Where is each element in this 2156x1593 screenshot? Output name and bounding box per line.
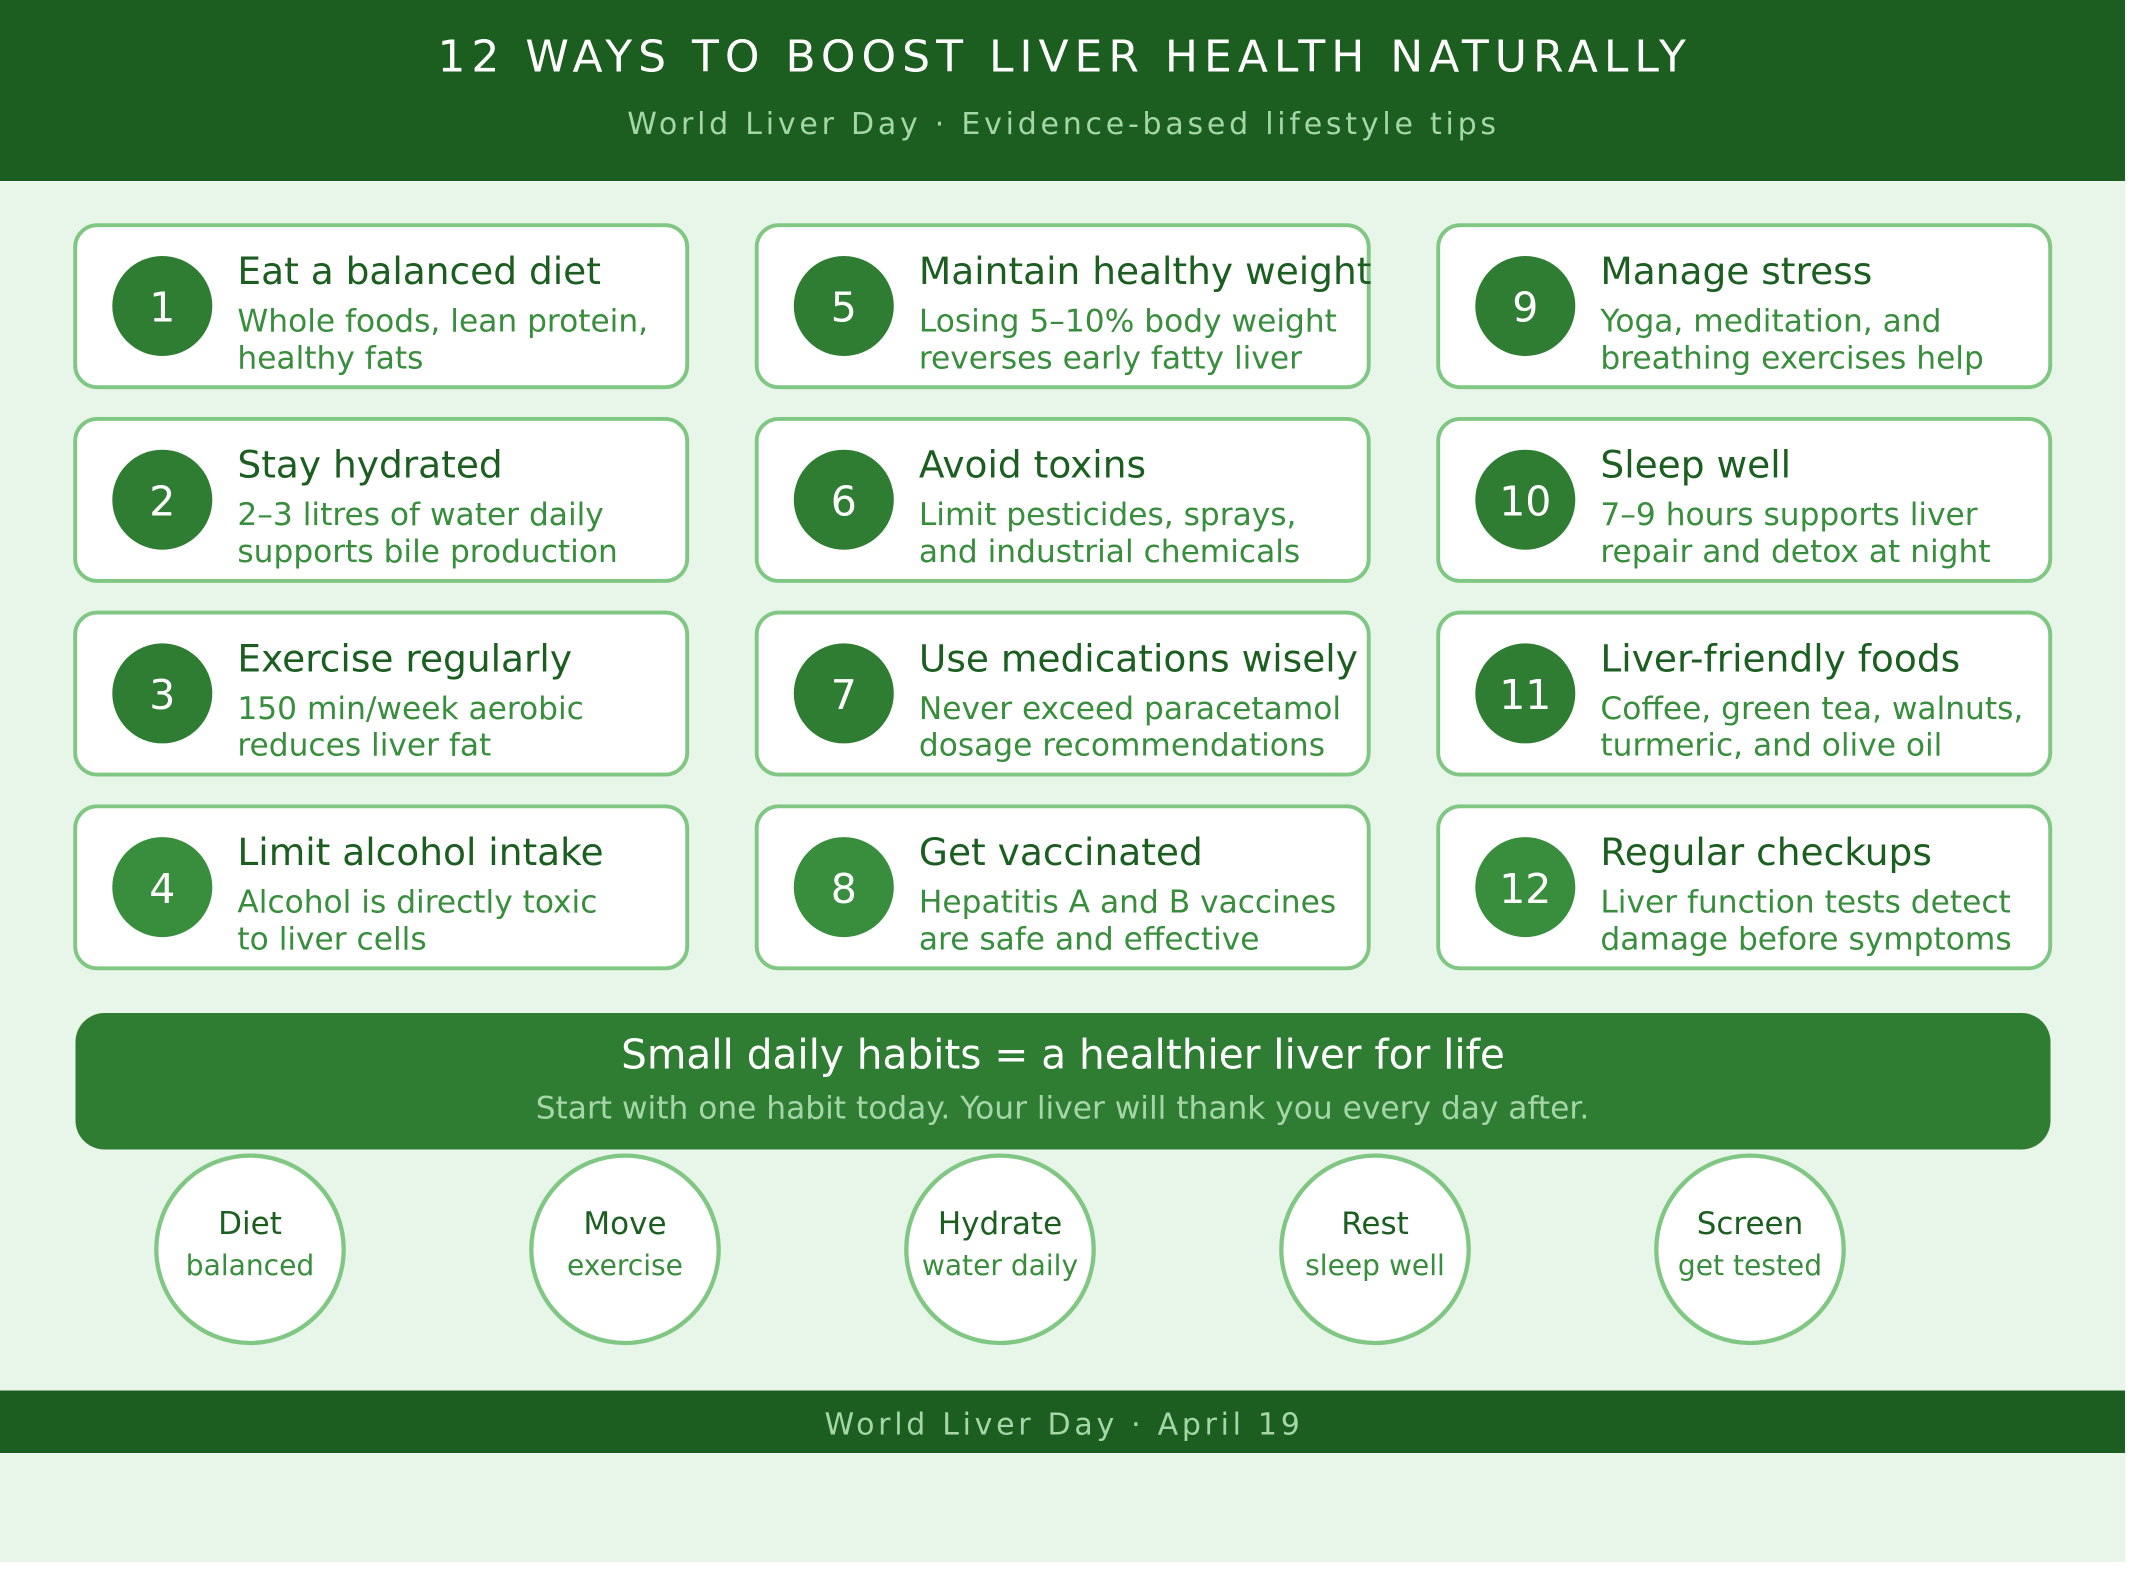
number badge 9 bbox=[1475, 256, 1575, 356]
number badge 4 bbox=[112, 837, 212, 937]
number badge 11 bbox=[1475, 643, 1575, 743]
tip 4 heading: Limit alcohol intake bbox=[237, 830, 604, 874]
tip 10 heading: Sleep well bbox=[1600, 443, 1791, 487]
tip 7 description: Never exceed paracetamol bbox=[919, 691, 1341, 727]
tip 6 description: Limit pesticides, sprays, bbox=[919, 497, 1296, 533]
tip 9 description bbox=[1599, 304, 1984, 376]
pill: screen bbox=[1656, 1156, 1844, 1343]
pill: diet bbox=[156, 1156, 344, 1343]
number badge 8 bbox=[794, 837, 894, 937]
pill: hydrate: water daily bbox=[922, 1249, 1078, 1282]
tip 2 description bbox=[237, 497, 618, 570]
tip 6 description: and industrial chemicals bbox=[919, 534, 1300, 570]
tip 11 heading: Liver-friendly foods bbox=[1600, 636, 1960, 680]
number badge 6: 6 bbox=[831, 477, 857, 525]
number badge 5 bbox=[794, 256, 894, 356]
tip 12 heading: Regular checkups bbox=[1600, 830, 1932, 874]
number badge 7 bbox=[794, 643, 894, 743]
panel: tip 12 bbox=[1438, 806, 2050, 968]
tip 11 description: Coffee, green tea, walnuts, bbox=[1600, 691, 2023, 727]
tip 7 description: dosage recommendations bbox=[919, 728, 1325, 764]
tip 4 description: Alcohol is directly toxic bbox=[237, 885, 597, 921]
panel: tip 1 bbox=[75, 225, 687, 387]
footer band bbox=[0, 1390, 2125, 1453]
pill: move: exercise bbox=[567, 1249, 683, 1282]
number badge 2: 2 bbox=[149, 477, 175, 525]
number badge 12: 12 bbox=[1499, 865, 1551, 913]
tip 4 description bbox=[237, 885, 597, 957]
number badge 12 bbox=[1475, 837, 1575, 937]
tip 3 description bbox=[237, 691, 584, 764]
panel: tip 5 bbox=[757, 225, 1371, 387]
pill: rest: sleep well bbox=[1305, 1249, 1445, 1282]
tip 5 heading: Maintain healthy weight bbox=[919, 249, 1371, 293]
number badge 9: 9 bbox=[1512, 284, 1538, 332]
tip 3 description: 150 min/week aerobic bbox=[237, 691, 584, 727]
number badge 10 bbox=[1475, 450, 1575, 550]
tip 9 heading: Manage stress bbox=[1600, 249, 1872, 293]
panel: tip 2 bbox=[75, 419, 687, 581]
number badge 11: 11 bbox=[1499, 671, 1551, 719]
banner headline: Small daily habits = a healthier liver for life bbox=[621, 1030, 1505, 1078]
subtitle: World Liver Day · Evidence-based lifestyle tips bbox=[627, 107, 1500, 142]
tip 3 heading: Exercise regularly bbox=[237, 636, 572, 680]
pill: screen: get tested bbox=[1678, 1249, 1822, 1282]
panel: tip 11 bbox=[1438, 613, 2050, 775]
tip 8 description bbox=[919, 885, 1336, 957]
tip 9 description: Yoga, meditation, and bbox=[1599, 304, 1941, 340]
number badge 3 bbox=[112, 643, 212, 743]
header band bbox=[0, 0, 2125, 181]
tip 10 description bbox=[1600, 497, 1991, 570]
pill: screen: Screen bbox=[1697, 1206, 1803, 1242]
number badge 10: 10 bbox=[1499, 477, 1551, 525]
tip 1 description: Whole foods, lean protein, bbox=[237, 304, 648, 340]
tip 2 description: 2–3 litres of water daily bbox=[237, 497, 604, 533]
tip 7 heading: Use medications wisely bbox=[919, 636, 1358, 680]
number badge 4: 4 bbox=[149, 865, 175, 913]
pill: move bbox=[531, 1156, 719, 1343]
banner subtext: Start with one habit today. Your liver will thank you every day after. bbox=[536, 1090, 1589, 1126]
tip 1 description bbox=[237, 304, 648, 376]
tip 2 heading: Stay hydrated bbox=[237, 443, 503, 487]
pill: hydrate: Hydrate bbox=[938, 1206, 1062, 1242]
panel: tip 10 bbox=[1438, 419, 2050, 581]
tip 12 description: damage before symptoms bbox=[1600, 921, 2012, 957]
tip 1 heading: Eat a balanced diet bbox=[237, 249, 601, 293]
tip 5 description: reverses early fatty liver bbox=[919, 340, 1302, 376]
tip 11 description: turmeric, and olive oil bbox=[1600, 728, 1942, 764]
pill: hydrate bbox=[906, 1156, 1094, 1343]
pill: move: Move bbox=[583, 1206, 667, 1242]
tip 1 description: healthy fats bbox=[237, 340, 423, 376]
tip 5 description bbox=[919, 304, 1337, 376]
tip 12 description bbox=[1600, 885, 2012, 957]
number badge 1: 1 bbox=[149, 284, 175, 332]
tip 8 description: Hepatitis A and B vaccines bbox=[919, 885, 1336, 921]
tip 3 description: reduces liver fat bbox=[237, 728, 491, 764]
number badge 7: 7 bbox=[831, 671, 857, 719]
panel: tip 9 bbox=[1438, 225, 2050, 387]
panel: tip 7 bbox=[757, 613, 1369, 775]
tip 6 heading: Avoid toxins bbox=[919, 443, 1146, 487]
callout banner bbox=[76, 1013, 2050, 1150]
pill: diet: balanced bbox=[186, 1249, 314, 1282]
tip 12 description: Liver function tests detect bbox=[1600, 885, 2011, 921]
number badge 2 bbox=[112, 450, 212, 550]
pill: rest bbox=[1281, 1156, 1469, 1343]
number badge 8: 8 bbox=[831, 865, 857, 913]
number badge 6 bbox=[794, 450, 894, 550]
tip 7 description bbox=[919, 691, 1341, 764]
tip 2 description: supports bile production bbox=[237, 534, 618, 570]
panel: tip 3 bbox=[75, 613, 687, 775]
number badge 3: 3 bbox=[149, 671, 175, 719]
footer text: World Liver Day · April 19 bbox=[825, 1407, 1303, 1442]
tip 6 description bbox=[919, 497, 1300, 570]
pill: rest: Rest bbox=[1341, 1206, 1409, 1242]
tip 10 description: repair and detox at night bbox=[1600, 534, 1991, 570]
tip 8 heading: Get vaccinated bbox=[919, 830, 1203, 874]
number badge 5: 5 bbox=[831, 284, 857, 332]
tip 8 description: are safe and effective bbox=[919, 921, 1260, 957]
panel: tip 6 bbox=[757, 419, 1369, 581]
tip 11 description bbox=[1600, 691, 2023, 764]
tip 10 description: 7–9 hours supports liver bbox=[1600, 497, 1978, 533]
pill: diet: Diet bbox=[218, 1206, 282, 1242]
tip 9 description: breathing exercises help bbox=[1600, 340, 1984, 376]
panel: tip 4 bbox=[75, 806, 687, 968]
tip 4 description: to liver cells bbox=[237, 921, 427, 957]
title: 12 WAYS TO BOOST LIVER HEALTH NATURALLY bbox=[437, 32, 1692, 83]
tip 5 description: Losing 5–10% body weight bbox=[919, 304, 1337, 340]
panel: tip 8 bbox=[757, 806, 1369, 968]
number badge 1 bbox=[112, 256, 212, 356]
